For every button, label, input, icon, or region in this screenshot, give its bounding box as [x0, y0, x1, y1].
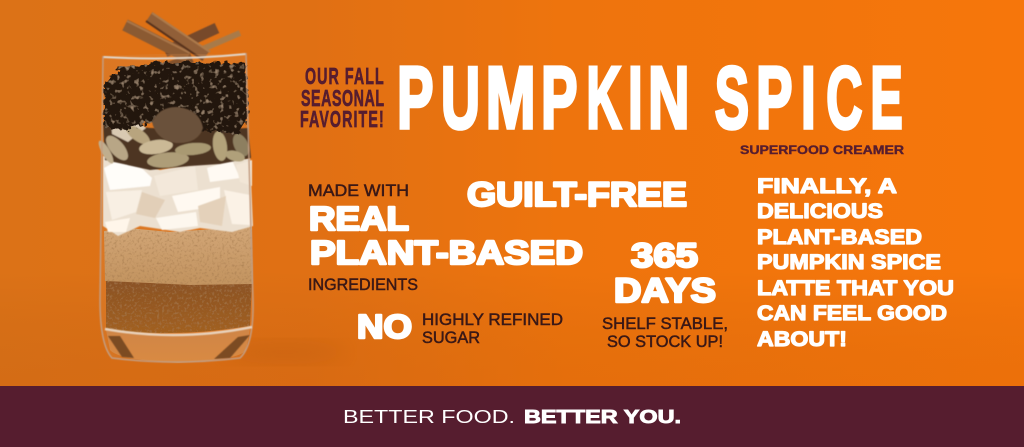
layer: cardamom pods — [96, 115, 252, 170]
text block: made with real plant-based ingredients: REAL — [309, 200, 409, 237]
title: pumpkin spice: I — [801, 48, 816, 147]
text block: made with real plant-based ingredients: MADE WITH — [308, 182, 409, 200]
title: pumpkin spice — [397, 48, 903, 147]
text block: finally a delicious latte — [757, 175, 954, 351]
glass body — [100, 54, 253, 362]
footer tagline: BETTER FOOD. — [343, 406, 515, 427]
title: pumpkin spice: P — [397, 48, 434, 147]
footer band — [0, 386, 1024, 447]
title: pumpkin spice: U — [441, 48, 480, 147]
title: pumpkin spice: P — [756, 48, 792, 147]
text block: finally a delicious latte: DELICIOUS — [757, 200, 883, 223]
callout: no highly refined sugar: HIGHLY REFINED — [422, 311, 563, 329]
callout: 365 days shelf stable: DAYS — [614, 272, 716, 310]
callout: 365 days shelf stable: SHELF STABLE, — [602, 315, 728, 333]
text block: made with real plant-based ingredients — [308, 182, 583, 294]
title: pumpkin spice: S — [715, 48, 749, 147]
heading: our fall seasonal favorite: OUR FALL — [305, 65, 384, 90]
footer tagline — [343, 406, 681, 427]
title: pumpkin spice: K — [586, 48, 621, 147]
glass base — [106, 328, 250, 363]
heading: our fall seasonal favorite: SEASONAL — [301, 87, 384, 112]
text block: finally a delicious latte: LATTE THAT YOU — [757, 277, 954, 300]
layer: cinnamon powder — [106, 280, 252, 333]
layer: coconut flakes — [103, 155, 253, 236]
text block: finally a delicious latte: CAN FEEL GOOD — [757, 302, 947, 325]
glass rim and edges — [100, 53, 253, 362]
title: pumpkin spice: I — [628, 48, 643, 147]
text block: made with real plant-based ingredients: INGREDIENTS — [308, 276, 418, 294]
title: pumpkin spice: E — [870, 48, 903, 147]
glass shadow — [225, 340, 345, 364]
callout: no highly refined sugar: NO — [357, 308, 412, 345]
text block: finally a delicious latte: FINALLY, A — [757, 175, 897, 198]
subtitle: superfood creamer: SUPERFOOD CREAMER — [740, 143, 904, 157]
callout: 365 days shelf stable — [602, 237, 728, 351]
text block: finally a delicious latte: PUMPKIN SPICE — [757, 251, 941, 274]
footer tagline: BETTER YOU. — [524, 406, 681, 427]
heading: our fall seasonal favorite: FAVORITE! — [300, 108, 384, 133]
callout: no highly refined sugar — [357, 308, 563, 347]
callout: no highly refined sugar: SUGAR — [422, 329, 480, 347]
callout: 365 days shelf stable: 365 — [631, 237, 698, 275]
callout: guilt-free: GUILT-FREE — [467, 176, 687, 214]
text block: made with real plant-based ingredients: PLANT-BASED — [310, 234, 583, 271]
icon: layered spice glass — [96, 13, 345, 364]
title: pumpkin spice: N — [648, 48, 690, 147]
heading: our fall seasonal favorite — [300, 65, 384, 133]
text block: finally a delicious latte: PLANT-BASED — [757, 226, 922, 249]
title: pumpkin spice: P — [541, 48, 578, 147]
title: pumpkin spice: C — [826, 48, 862, 147]
layer: tan sugar — [104, 226, 253, 285]
title: pumpkin spice: M — [486, 48, 536, 147]
callout: 365 days shelf stable: SO STOCK UP! — [607, 333, 723, 351]
cinnamon sticks — [125, 13, 240, 74]
text block: finally a delicious latte: ABOUT! — [757, 328, 847, 351]
layer: cloves — [104, 62, 248, 134]
icon: nutmeg — [152, 107, 203, 143]
